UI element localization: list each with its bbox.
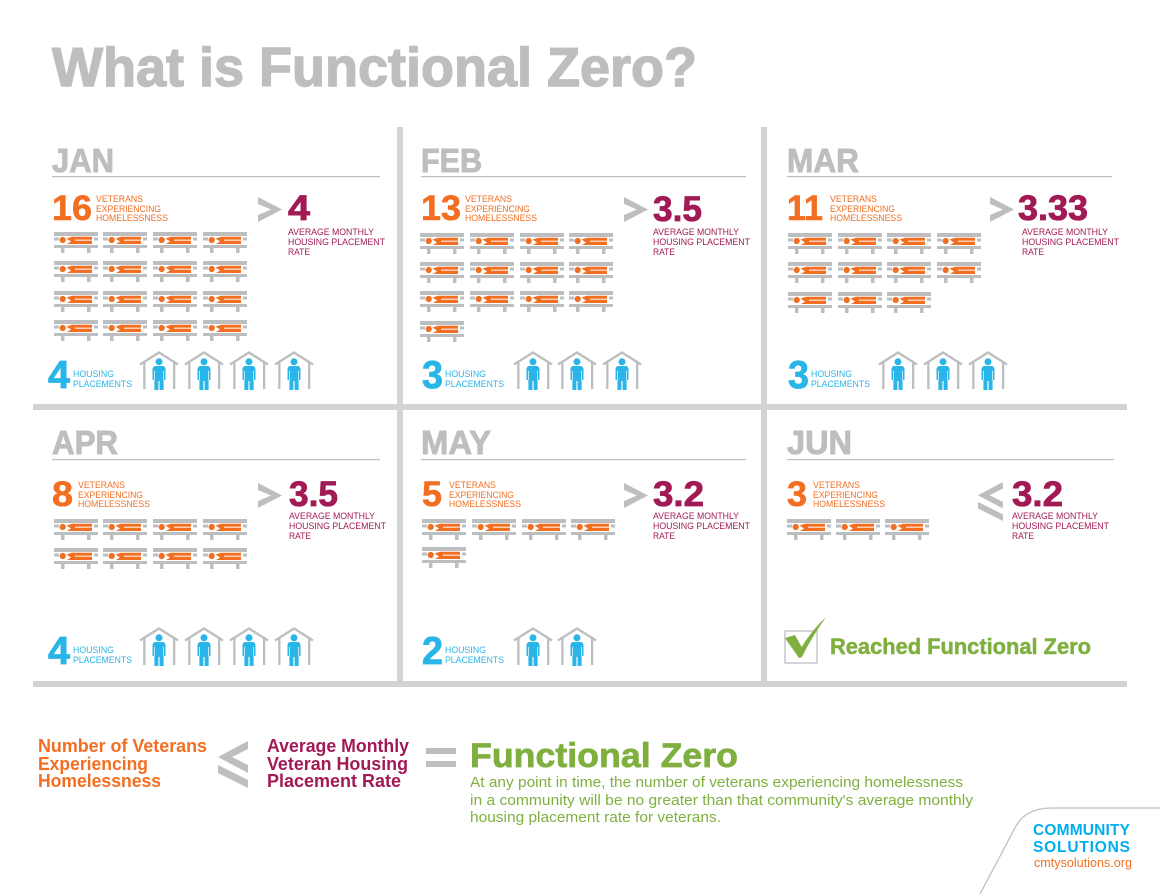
placement rate: 3.2 — [1012, 475, 1109, 541]
veterans count: 8: 8 — [52, 475, 73, 514]
equation: number of veterans: Number of Veterans — [38, 736, 207, 756]
placement rate: 3.2: AVERAGE MONTHLY — [1012, 511, 1098, 521]
icons: 16 people on benches — [54, 232, 247, 341]
equals symbol — [426, 748, 456, 767]
veterans count: 16: VETERANS — [96, 194, 143, 204]
panel: April — [48, 424, 386, 673]
placement rate: 3.33 — [1018, 189, 1119, 257]
placement rate: 3.2: AVERAGE MONTHLY — [653, 511, 739, 521]
icons: 5 people on benches — [422, 519, 615, 568]
logo: Community Solutions: cmtysolutions.org — [1034, 855, 1132, 870]
title: What is Functional Zero? — [52, 36, 697, 98]
placement rate: 3.5: HOUSING PLACEMENT — [653, 237, 750, 247]
placement rate: 3.2: RATE — [1012, 531, 1034, 541]
logo: Community Solutions: SOLUTIONS — [1033, 839, 1130, 856]
status: reached functional zero: Reached Functional Zero — [830, 634, 1091, 659]
veterans count: 5: VETERANS — [449, 480, 496, 490]
housing placements: 4 — [48, 628, 313, 673]
veterans count: 13 — [421, 189, 537, 228]
placement rate: 3.33: 3.33 — [1018, 189, 1088, 228]
placement rate: 3.5: HOUSING PLACEMENT — [289, 521, 386, 531]
veterans count: 16 — [52, 189, 168, 228]
month heading: MAR: MAR — [787, 142, 859, 179]
veterans count: 8: VETERANS — [78, 480, 125, 490]
veterans count: 5: 5 — [422, 475, 442, 514]
grid dividers — [33, 127, 1127, 687]
month heading: APR: APR — [52, 424, 118, 461]
veterans count: 13: VETERANS — [465, 194, 512, 204]
placement rate: 3.2: 3.2 — [1012, 475, 1063, 514]
placement rate: 3.33: AVERAGE MONTHLY — [1022, 227, 1108, 237]
veterans count: 5 — [422, 475, 521, 514]
veterans count: 16: EXPERIENCING — [96, 204, 161, 214]
housing placements: 3: 3 — [788, 354, 809, 397]
equation: number of veterans: Experiencing — [38, 754, 148, 774]
icons: 11 people on benches — [788, 233, 981, 313]
logo: Community Solutions: COMMUNITY — [1033, 822, 1131, 839]
veterans count: 3: VETERANS — [813, 480, 860, 490]
housing placements: 2 — [422, 628, 596, 673]
placement rate: 3.2: HOUSING PLACEMENT — [653, 521, 750, 531]
month heading: FEB: FEB — [421, 142, 482, 179]
veterans count: 11 — [787, 189, 902, 228]
placement rate: 4 — [288, 189, 385, 257]
functional zero definition: housing placement rate for veterans. — [470, 809, 721, 826]
placement rate: 3.5: 3.5 — [653, 190, 702, 229]
icon: green check in box — [785, 617, 826, 663]
veterans count: 3: EXPERIENCING — [813, 490, 878, 500]
functional zero definition: At any point in time, the number of veterans experiencing homelessness — [470, 774, 963, 791]
placement rate: 3.5: RATE — [653, 247, 675, 257]
housing placements: 2: HOUSING — [445, 645, 486, 655]
equation: average monthly placement rate — [267, 736, 409, 791]
placement rate: 3.33: HOUSING PLACEMENT — [1022, 237, 1119, 247]
icons: 3 people on benches — [787, 519, 929, 540]
placement rate: 3.5 — [289, 475, 386, 541]
equation: number of veterans — [38, 736, 207, 791]
housing placements: 4: HOUSING — [73, 645, 114, 655]
functional zero definition: in a community will be no greater than that community's average monthly — [470, 792, 974, 809]
month heading: MAY: MAY — [421, 424, 491, 461]
veterans count: 5: EXPERIENCING — [449, 490, 514, 500]
veterans count: 3: HOMELESSNESS — [813, 499, 885, 509]
placement rate: 3.2: RATE — [653, 531, 675, 541]
housing placements: 3 — [422, 352, 641, 397]
panel: January — [48, 142, 385, 397]
placement rate: 3.5: 3.5 — [289, 475, 338, 514]
panel: February — [420, 142, 750, 397]
greater-than arrow — [990, 197, 1014, 222]
veterans count: 13: EXPERIENCING — [465, 204, 530, 214]
placement rate: 3.5 — [653, 190, 750, 257]
equation: number of veterans: Homelessness — [38, 771, 161, 791]
housing placements: 4: PLACEMENTS — [73, 379, 132, 389]
placement rate: 4: HOUSING PLACEMENT — [288, 237, 385, 247]
placement rate: 4: RATE — [288, 247, 310, 257]
panel: May — [421, 424, 750, 673]
housing placements: 4: 4 — [48, 354, 70, 397]
functional zero definition — [470, 737, 974, 826]
veterans count: 13: 13 — [421, 189, 461, 228]
logo: Community Solutions — [980, 808, 1160, 894]
less-than-or-equal symbol — [218, 741, 248, 788]
icons: 8 people on benches — [54, 519, 247, 569]
veterans count: 11: VETERANS — [830, 194, 877, 204]
veterans count: 8: HOMELESSNESS — [78, 499, 150, 509]
greater-than arrow — [258, 483, 282, 508]
placement rate: 3.5: AVERAGE MONTHLY — [653, 227, 739, 237]
placement rate: 3.5: RATE — [289, 531, 311, 541]
veterans count: 11: EXPERIENCING — [830, 204, 895, 214]
panel: June — [785, 424, 1114, 663]
veterans count: 16: HOMELESSNESS — [96, 213, 168, 223]
housing placements: 3: 3 — [422, 354, 443, 397]
housing placements: 4 — [48, 352, 313, 397]
placement rate: 3.2: HOUSING PLACEMENT — [1012, 521, 1109, 531]
housing placements: 3: PLACEMENTS — [811, 379, 870, 389]
placement rate: 3.2: 3.2 — [653, 475, 704, 514]
equation: average monthly placement rate: Placement Rate — [267, 771, 401, 791]
housing placements: 3 — [788, 352, 1007, 397]
veterans count: 5: HOMELESSNESS — [449, 499, 521, 509]
housing placements: 4: HOUSING — [73, 369, 114, 379]
placement rate: 4: 4 — [288, 189, 311, 228]
housing placements: 3: HOUSING — [445, 369, 486, 379]
placement rate: 3.2 — [653, 475, 750, 541]
month heading: JAN: JAN — [52, 142, 114, 179]
housing placements: 4: PLACEMENTS — [73, 655, 132, 665]
equation: average monthly placement rate: Average Monthly — [267, 736, 409, 756]
icons: 13 people on benches — [420, 233, 613, 342]
veterans count: 3: 3 — [787, 475, 807, 514]
placement rate: 4: AVERAGE MONTHLY — [288, 227, 374, 237]
placement rate: 3.33: RATE — [1022, 247, 1044, 257]
panel: March — [787, 142, 1119, 397]
veterans count: 11: HOMELESSNESS — [830, 213, 902, 223]
placement rate: 3.5: AVERAGE MONTHLY — [289, 511, 375, 521]
veterans count: 11: 11 — [787, 189, 823, 228]
month heading: JUN: JUN — [787, 424, 852, 461]
greater-than arrow — [624, 483, 648, 508]
housing placements: 2: 2 — [422, 630, 443, 673]
less-than-or-equal arrow — [978, 482, 1003, 521]
veterans count: 16: 16 — [52, 189, 92, 228]
housing placements: 4: 4 — [48, 630, 70, 673]
housing placements: 3: HOUSING — [811, 369, 852, 379]
veterans count: 8 — [52, 475, 150, 514]
housing placements: 3: PLACEMENTS — [445, 379, 504, 389]
functional zero definition: Functional Zero — [470, 737, 738, 775]
veterans count: 8: EXPERIENCING — [78, 490, 143, 500]
greater-than arrow — [258, 197, 282, 222]
housing placements: 2: PLACEMENTS — [445, 655, 504, 665]
equation: average monthly placement rate: Veteran Housing — [267, 754, 408, 774]
veterans count: 3 — [787, 475, 885, 514]
veterans count: 13: HOMELESSNESS — [465, 213, 537, 223]
greater-than arrow — [624, 197, 648, 222]
